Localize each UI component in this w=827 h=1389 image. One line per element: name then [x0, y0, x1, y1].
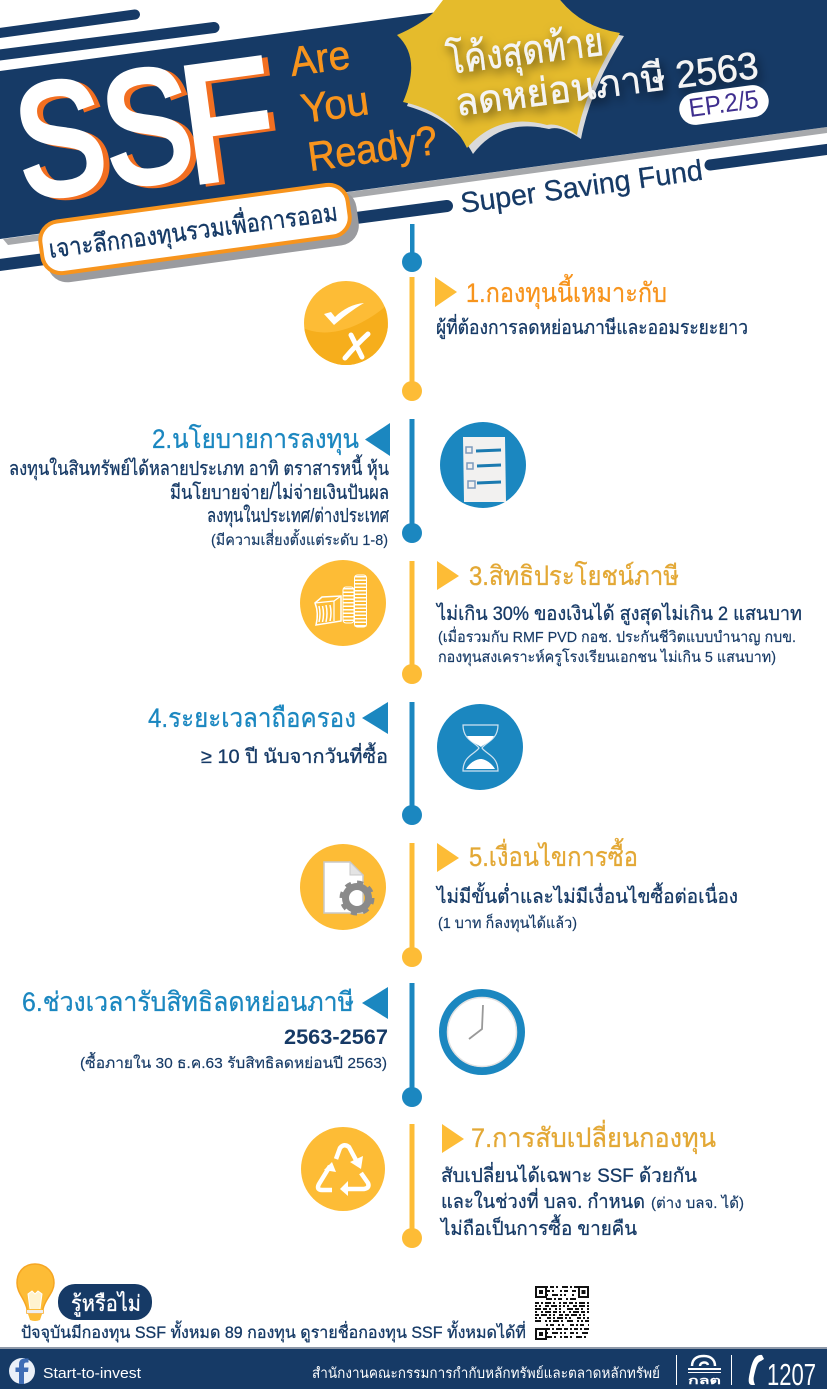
connector [402, 1124, 422, 1248]
starburst badge [397, 0, 624, 154]
SEC logo: กลต [688, 1375, 721, 1387]
arrow [362, 702, 388, 734]
icon: facebook [9, 1358, 35, 1384]
pill heading [58, 1284, 152, 1320]
body: กองทุนสงเคราะห์ครูโรงเรียนเอกชน ไม่เกิน 5 แสนบาท) [438, 648, 776, 667]
organisation name: สำนักงานคณะกรรมการกำกับหลักทรัพย์และตลาดหลักทรัพย์ [312, 1365, 660, 1382]
arrow [437, 561, 459, 590]
body: (เมื่อรวมกับ RMF PVD กอช. ประกันชีวิตแบบบำนาญ กบข. [438, 626, 796, 646]
callout text: ปัจจุบันมีกองทุน SSF ทั้งหมด 89 กองทุน ดูรายชื่อกองทุน SSF ทั้งหมดได้ที่ [21, 1320, 526, 1343]
body: (ต่าง บลจ. ได้) [651, 1194, 744, 1212]
body: และในช่วงที่ บลจ. กำหนด [441, 1188, 645, 1213]
SSF logo: S [92, 33, 202, 222]
body: 2563-2567 [284, 1026, 388, 1049]
Are You Ready: You [298, 77, 372, 132]
body [435, 602, 802, 667]
connector [402, 561, 422, 684]
body: ลงทุนในประเทศ/ต่างประเทศ [207, 504, 389, 528]
timeline start [402, 224, 422, 272]
icon: check and cross [304, 281, 388, 365]
heading: 5.เงื่อนไขการซื้อ [469, 838, 638, 872]
facebook name: Start-to-invest [43, 1365, 142, 1382]
body [439, 1162, 744, 1240]
body [9, 454, 389, 549]
body: ลงทุนในสินทรัพย์ได้หลายประเภท อาทิ ตราสารหนี้ หุ้น [9, 454, 389, 481]
icon: hourglass [437, 704, 523, 790]
body: สับเปลี่ยนได้เฉพาะ SSF ด้วยกัน [441, 1162, 697, 1187]
connector [402, 983, 422, 1107]
Super Saving Fund: Super Saving Fund [459, 155, 705, 220]
body: (มีความเสี่ยงตั้งแต่ระดับ 1-8) [211, 529, 388, 549]
body [80, 1026, 388, 1072]
icon: recycle [301, 1127, 385, 1211]
SSF logo: F [176, 25, 291, 220]
section 6: tax claim period [22, 983, 521, 1107]
icon: light bulb [17, 1264, 54, 1321]
SSF logo [5, 23, 291, 236]
heading: 1.กองทุนนี้เหมาะกับ [466, 274, 667, 309]
section 3: tax benefit [300, 560, 802, 684]
arrow [437, 843, 459, 872]
arrow [362, 987, 388, 1019]
SEC logo [676, 1355, 732, 1387]
body: (1 บาท ก็ลงทุนได้แล้ว) [438, 913, 577, 933]
hotline [749, 1355, 816, 1389]
body: ≥ 10 ปี นับจากวันที่ซื้อ [201, 742, 388, 768]
icon: clock [443, 993, 521, 1071]
SSF logo: S [98, 35, 208, 224]
top decorative stripes [0, 14, 214, 56]
SSF logo: S [5, 45, 115, 234]
Are You Ready [287, 31, 440, 180]
section 7: fund switching [301, 1120, 744, 1248]
did you know callout [17, 1264, 589, 1343]
icon: coins and cash [300, 560, 386, 646]
connector [402, 702, 422, 825]
badge headline: ลดหย่อนภาษี 2563 [453, 45, 761, 125]
footer bar [0, 1347, 827, 1389]
body: (ซื้อภายใน 30 ธ.ค.63 รับสิทธิลดหย่อนปี 2563) [80, 1052, 387, 1072]
episode pill: EP.2/5 [687, 84, 760, 123]
body: ไม่มีขั้นต่ำและไม่มีเงื่อนไขซื้อต่อเนื่อง [435, 882, 738, 908]
header banner [0, 0, 827, 285]
section 4: holding period [148, 702, 523, 825]
SSF logo: S [11, 47, 121, 236]
heading: 4.ระยะเวลาถือครอง [148, 703, 356, 733]
heading: 3.สิทธิประโยชน์ภาษี [469, 561, 679, 591]
body: ผู้ที่ต้องการลดหย่อนภาษีและออมระยะยาว [436, 314, 748, 340]
lower stripes [0, 149, 827, 266]
subtitle pill: เจาะลึกกองทุนรวมเพื่อการออม [47, 195, 339, 265]
heading: 7.การสับเปลี่ยนกองทุน [471, 1120, 716, 1154]
Are You Ready: Are [287, 31, 353, 85]
connector [402, 277, 422, 401]
heading: 6.ช่วงเวลารับสิทธิลดหย่อนภาษี [22, 987, 354, 1017]
arrow [365, 423, 390, 456]
section 1: suitability [300, 274, 748, 401]
connector [402, 419, 422, 543]
icon: document and gear [300, 844, 386, 930]
navy band [0, 0, 827, 245]
arrow [435, 277, 457, 307]
section 2: investment policy [9, 419, 526, 549]
body: ไม่เกิน 30% ของเงินได้ สูงสุดไม่เกิน 2 แสนบาท [435, 602, 802, 626]
connector [402, 843, 422, 967]
badge headline: โค้งสุดท้าย [444, 19, 606, 85]
icon: checklist [440, 422, 526, 508]
body: ไม่ถือเป็นการซื้อ ขายคืน [439, 1214, 637, 1240]
section 5: purchase conditions [300, 838, 738, 967]
pill heading: รู้หรือไม่ [71, 1291, 141, 1317]
body: มีนโยบายจ่าย/ไม่จ่ายเงินปันผล [170, 481, 389, 504]
body [435, 882, 738, 933]
Are You Ready: Ready? [305, 117, 440, 180]
SSF logo: F [170, 23, 285, 218]
subtitle pill [38, 182, 361, 285]
arrow [442, 1124, 464, 1153]
heading: 2.นโยบายการลงทุน [152, 424, 359, 455]
QR code [535, 1287, 589, 1339]
